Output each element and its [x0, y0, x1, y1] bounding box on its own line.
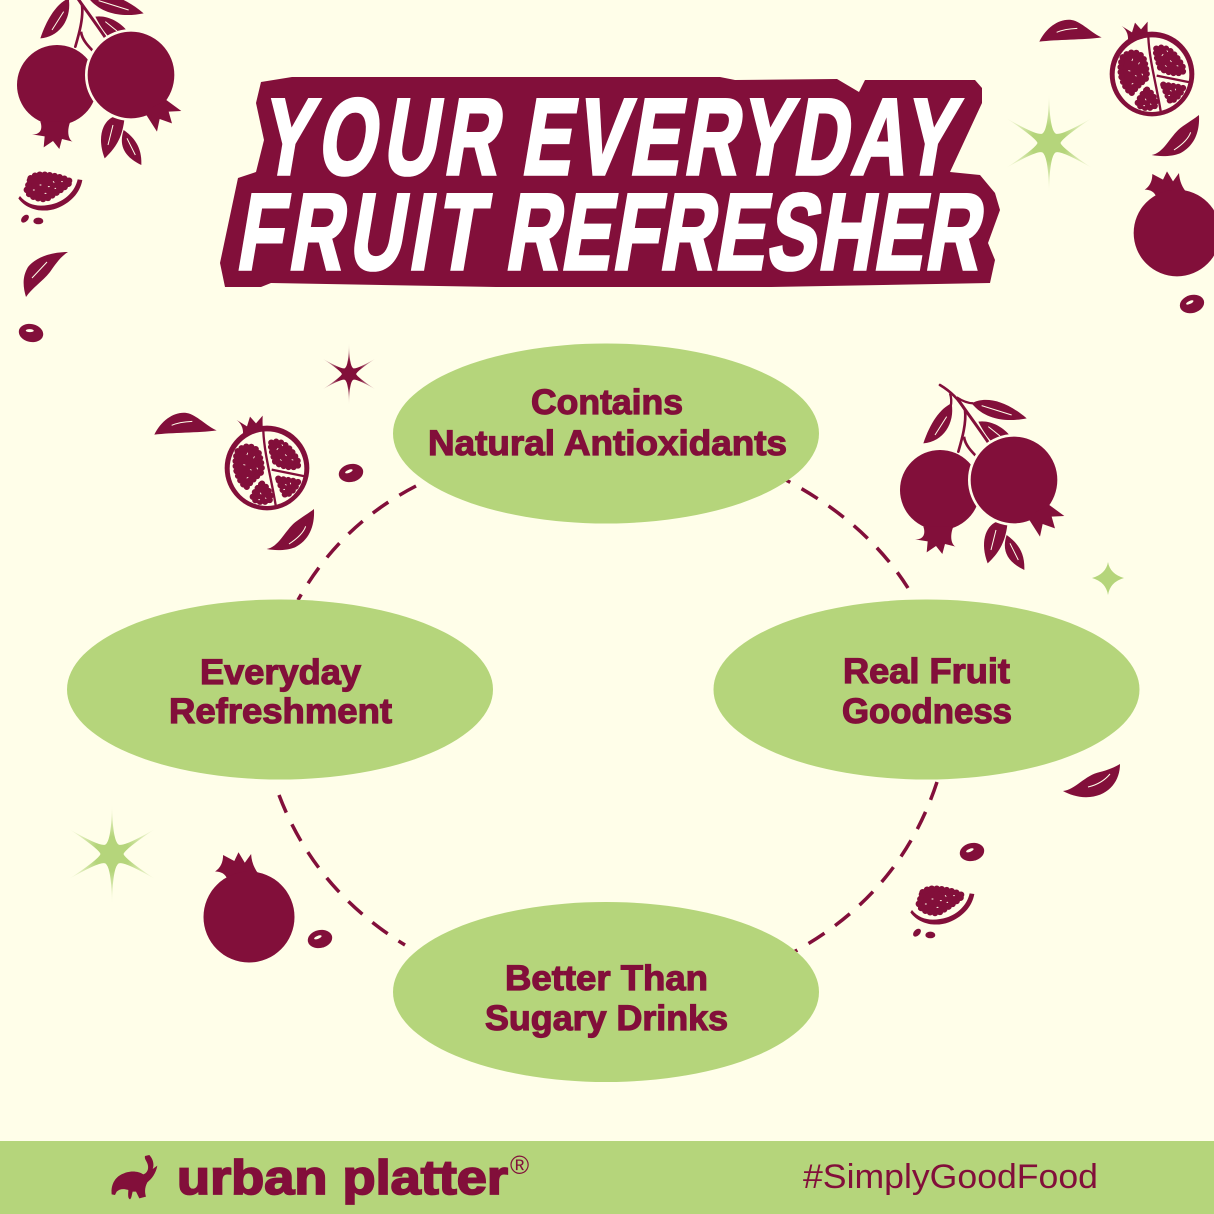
icon: pomegranate pair right: [900, 385, 1064, 570]
node: contains natural antioxidants: Contains: [531, 383, 683, 422]
node: better than sugary drinks: Better Than: [505, 959, 708, 998]
title backing shape: [220, 77, 1000, 287]
icon: small green sparkle: [1092, 562, 1124, 595]
icon: diagonal leaf top right: [1152, 115, 1199, 156]
icon: whole pomegranate right edge: [1134, 171, 1214, 276]
icon: seed centre left: [337, 462, 365, 484]
node: better than sugary drinks: [393, 902, 819, 1082]
icon: leaf centre left: [154, 413, 217, 435]
footer bar: [0, 1141, 1214, 1214]
icon: whole pomegranate lower left: [204, 852, 294, 962]
icon: seed lower right: [958, 841, 986, 863]
node: real fruit goodness: [714, 600, 1140, 780]
node: better than sugary drinks: Sugary Drinks: [485, 999, 728, 1038]
title text: REFRESHER: [500, 171, 994, 292]
icon: green sparkle top right: [1006, 93, 1092, 193]
title banner: [220, 76, 1000, 292]
node: everyday refreshment: Refreshment: [169, 692, 392, 731]
icon: leaf top left: [24, 252, 68, 297]
icon: green sparkle lower left: [69, 804, 155, 904]
dashed cycle connector: [279, 477, 937, 953]
title text: EVERYDAY: [516, 76, 968, 197]
hashtag: #SimplyGoodFood: [803, 1158, 1098, 1196]
icon: maroon sparkle: [322, 343, 376, 405]
icon: halved pomegranate centre left: [225, 416, 309, 510]
icon: elephant logo: [112, 1155, 157, 1199]
icon: cut pomegranate wedge lower right: [910, 889, 974, 938]
node: everyday refreshment: [67, 600, 493, 780]
icon: halved pomegranate top right: [1110, 22, 1194, 116]
node: contains natural antioxidants: Natural Antioxidants: [428, 424, 787, 463]
node: real fruit goodness: Real Fruit: [843, 652, 1010, 691]
title text: YOUR: [255, 76, 513, 197]
icon: leaf top right: [1039, 20, 1102, 42]
icon: seed lower left: [306, 928, 334, 950]
icon: seed top right: [1178, 292, 1206, 316]
node: contains natural antioxidants: [393, 344, 819, 524]
icon: diagonal leaf centre left: [267, 509, 314, 550]
title text: FRUIT: [231, 171, 496, 292]
icon: pomegranate pair top left: [17, 0, 181, 165]
node: everyday refreshment: Everyday: [200, 653, 362, 692]
node: real fruit goodness: Goodness: [842, 692, 1012, 731]
icon: leaf right: [1063, 764, 1120, 797]
icon: seed top left: [17, 322, 45, 344]
title text: [231, 76, 994, 292]
icon: cut pomegranate wedge top left: [18, 175, 82, 224]
brand name: urban platter: [177, 1152, 508, 1205]
registered mark: ®: [510, 1150, 529, 1180]
